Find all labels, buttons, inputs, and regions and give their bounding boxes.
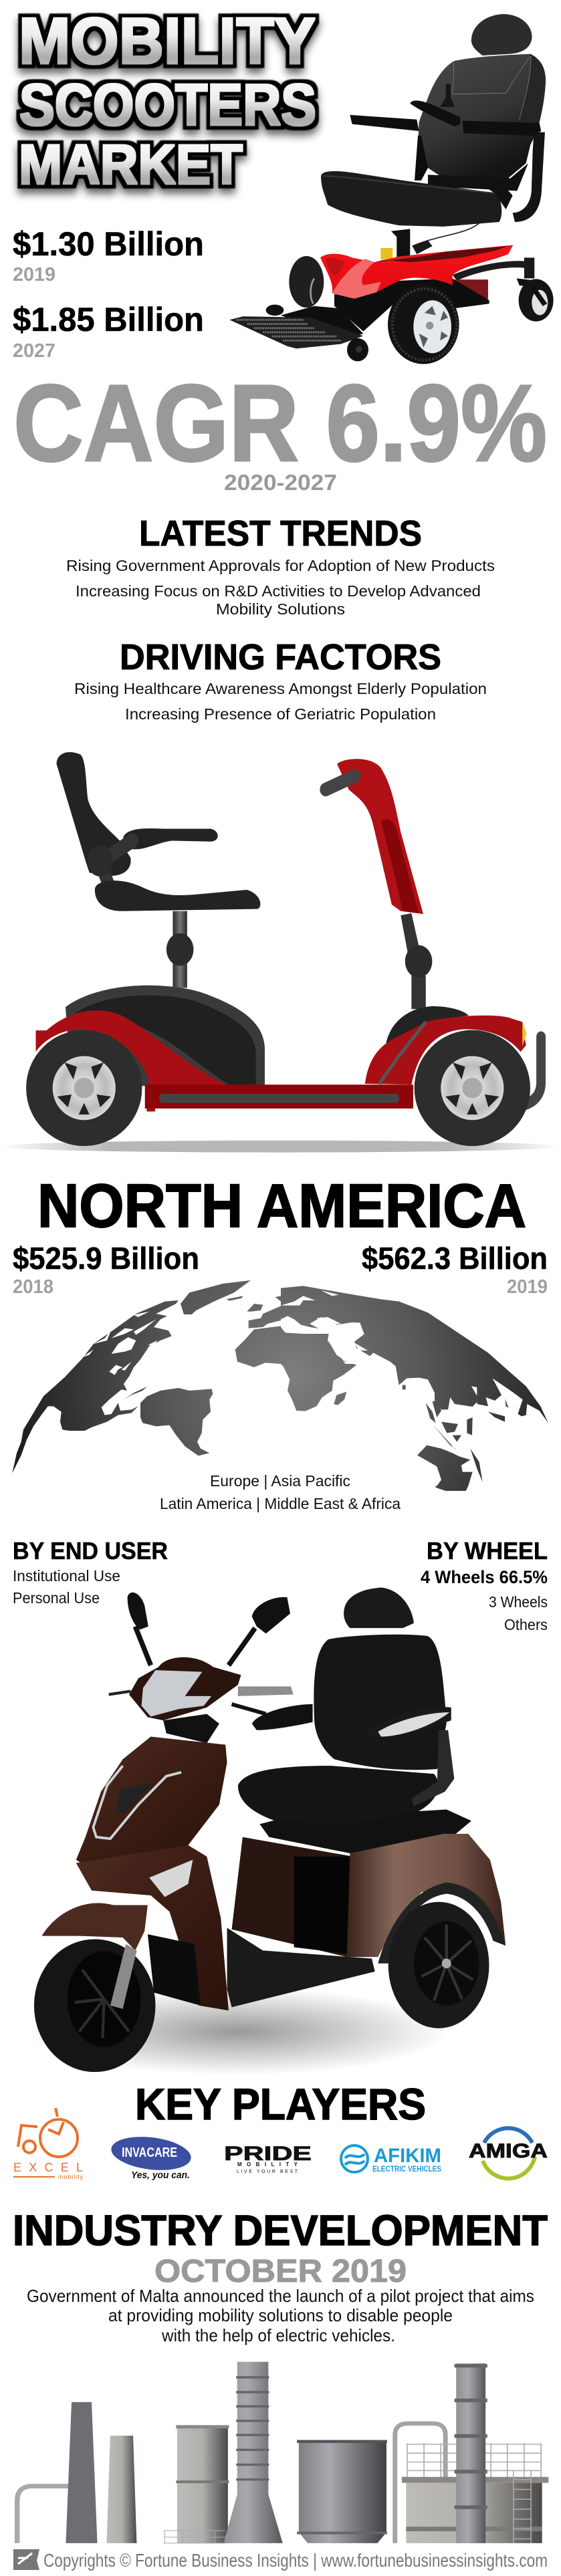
- right building: [402, 2477, 548, 2543]
- development description: with the help of electric vehicles.: [161, 2325, 395, 2345]
- illustration: industrial plant: [17, 2362, 548, 2543]
- rear fender: [347, 1834, 506, 1957]
- title: [19, 4, 316, 196]
- seat back: [57, 752, 131, 876]
- seat back: [415, 54, 546, 191]
- north america value 2018: 2018: [13, 1276, 53, 1298]
- logo: afikim electric vehicles: AFIKIM: [374, 2145, 441, 2167]
- segment: by end user: Institutional Use: [13, 1567, 120, 1585]
- front wheel: [388, 285, 459, 364]
- title: MARKET: [19, 133, 243, 196]
- segment: by wheel: BY WHEEL: [427, 1537, 548, 1564]
- segment: by wheel: [421, 1537, 548, 1633]
- railing: [407, 2443, 541, 2477]
- footplate: [229, 305, 363, 348]
- heading: industry development: INDUSTRY DEVELOPMENT: [13, 2206, 548, 2254]
- front fender: [42, 1903, 148, 1950]
- segment: by wheel: Others: [504, 1616, 548, 1633]
- handlebars: [109, 1686, 294, 1714]
- development description: [27, 2286, 534, 2345]
- seat back: [314, 1635, 447, 1770]
- lower fork cover: [148, 1934, 201, 2006]
- headset: [129, 1657, 241, 1720]
- footer logo: [13, 2549, 39, 2570]
- battery box: [453, 279, 488, 299]
- world map globe: [12, 1280, 548, 1491]
- logo: amiga: [469, 2128, 548, 2178]
- red body: [320, 245, 513, 299]
- rear wheel: [26, 1030, 142, 1146]
- handle grip: [326, 776, 355, 790]
- caster wheel: [517, 278, 554, 322]
- heading: north america: NORTH AMERICA: [37, 1172, 526, 1240]
- north america value 2018: $525.9 Billion: [13, 1241, 199, 1276]
- leg shield: [76, 1845, 229, 2010]
- image: power wheelchair: [229, 14, 554, 364]
- text: latest trends: Increasing Focus on R&D Activities to Develop Advanced: [76, 582, 481, 600]
- centre panel: [232, 1837, 353, 1957]
- title: MOBILITY: [19, 4, 316, 78]
- market value 2027: [13, 301, 204, 362]
- heading: latest trends: LATEST TRENDS: [139, 513, 422, 554]
- support bar: [513, 132, 545, 222]
- logo: invacare: Yes, you can.: [131, 2170, 190, 2181]
- battery cover: [66, 985, 265, 1086]
- CAGR period: 2020-2027: [224, 470, 337, 495]
- logo: pride mobility: [224, 2143, 312, 2174]
- logo: afikim electric vehicles: ELECTRIC VEHICLES: [372, 2164, 441, 2174]
- title: SCOOTERS: [19, 72, 316, 138]
- indicator: [149, 1860, 193, 1897]
- armrests: [252, 1704, 454, 1806]
- ladder: [514, 2470, 531, 2543]
- front bumper: [526, 1037, 541, 1104]
- floorboard: [227, 1927, 375, 2007]
- rear fender: [36, 1010, 229, 1111]
- front wheel: [34, 1939, 155, 2072]
- development date: OCTOBER 2019: [154, 2254, 407, 2289]
- market value 2019: $1.30 Billion: [13, 225, 204, 263]
- logo: pride mobility: LIVE YOUR BEST: [237, 2170, 298, 2174]
- front dome: [386, 1006, 469, 1046]
- headrest: [344, 1588, 414, 1628]
- north america value 2019: $562.3 Billion: [362, 1241, 548, 1276]
- market value 2027: 2027: [13, 340, 55, 362]
- logo: excel mobility: [13, 2108, 83, 2180]
- armrests: [350, 100, 541, 136]
- segment: by end user: Personal Use: [13, 1589, 100, 1607]
- tall ringed stack: [223, 2362, 283, 2543]
- armrest: [122, 828, 218, 849]
- image: brown three-wheel scooter: [26, 1588, 506, 2075]
- logo: pride mobility: PRIDE: [224, 2143, 312, 2165]
- joystick: [440, 84, 455, 107]
- heading: key players: KEY PLAYERS: [135, 2079, 426, 2129]
- seat frame: [259, 1810, 471, 1853]
- pipe arch: [395, 2424, 445, 2543]
- western hemisphere: [12, 1280, 281, 1473]
- small chimney: [106, 2436, 136, 2543]
- other regions: [160, 1472, 401, 1512]
- development description: Government of Malta announced the launch of a pilot project that aims: [27, 2286, 534, 2306]
- cylinder tank: [164, 2425, 229, 2543]
- large tank: [297, 2440, 387, 2543]
- caster arm: [453, 261, 525, 281]
- segment: by wheel: 4 Wheels 66.5%: [421, 1567, 548, 1587]
- rear left wheel: [289, 256, 324, 308]
- logo: invacare: INVACARE: [122, 2145, 177, 2160]
- market value 2027: $1.85 Billion: [13, 301, 204, 338]
- logo: excel mobility: mobility: [58, 2174, 83, 2180]
- front shield: [76, 1737, 227, 1869]
- logo: pride mobility: MOBILITY: [237, 2161, 298, 2168]
- right stack: [455, 2363, 487, 2543]
- text: driving factors: Increasing Presence of Geriatric Population: [125, 705, 436, 723]
- rear wheel: [388, 1902, 489, 2028]
- development description: at providing mobility solutions to disable people: [108, 2305, 453, 2325]
- segment: by end user: [13, 1537, 168, 1607]
- eastern hemisphere: [281, 1286, 548, 1491]
- seat cushion: [95, 881, 260, 911]
- logo: invacare: [110, 2133, 193, 2181]
- text: latest trends: Mobility Solutions: [216, 600, 345, 618]
- segment: by wheel: 3 Wheels: [489, 1593, 548, 1611]
- north america value 2019: 2019: [507, 1276, 548, 1298]
- mirrors: [128, 1593, 290, 1665]
- north america value 2019: [362, 1241, 548, 1298]
- north america value 2018: [13, 1241, 199, 1298]
- segment: by end user: BY END USER: [13, 1537, 168, 1564]
- market value 2019: [13, 225, 204, 285]
- logo: amiga: AMIGA: [469, 2140, 548, 2162]
- headrest: [471, 14, 532, 55]
- logo: excel mobility: EXCEL: [13, 2161, 83, 2174]
- other regions: Latin America | Middle East & Africa: [160, 1495, 401, 1512]
- logo: afikim electric vehicles: [341, 2145, 441, 2174]
- small anti-tip wheel: [347, 338, 368, 361]
- other regions: Europe | Asia Pacific: [210, 1472, 350, 1490]
- floor: [145, 1084, 413, 1108]
- front fender: [365, 1016, 526, 1084]
- seat post and cable: [380, 223, 479, 259]
- front wheel: [415, 1030, 530, 1146]
- text: latest trends: Rising Government Approvals for Adoption of New Products: [66, 557, 495, 574]
- image: red mobility scooter: [0, 752, 561, 1153]
- text: driving factors: [74, 680, 487, 723]
- tiller: [337, 759, 423, 914]
- text: driving factors: Rising Healthcare Awareness Amongst Elderly Population: [74, 680, 487, 697]
- chimney with pipe: [17, 2402, 98, 2543]
- seat cushion: [321, 171, 513, 227]
- headlight: [142, 1670, 211, 1716]
- front fork: [110, 1944, 137, 2009]
- text: latest trends: [66, 557, 495, 618]
- market value 2019: 2019: [13, 264, 55, 285]
- seat cushion: [238, 1766, 439, 1824]
- heading: driving factors: DRIVING FACTORS: [120, 637, 441, 677]
